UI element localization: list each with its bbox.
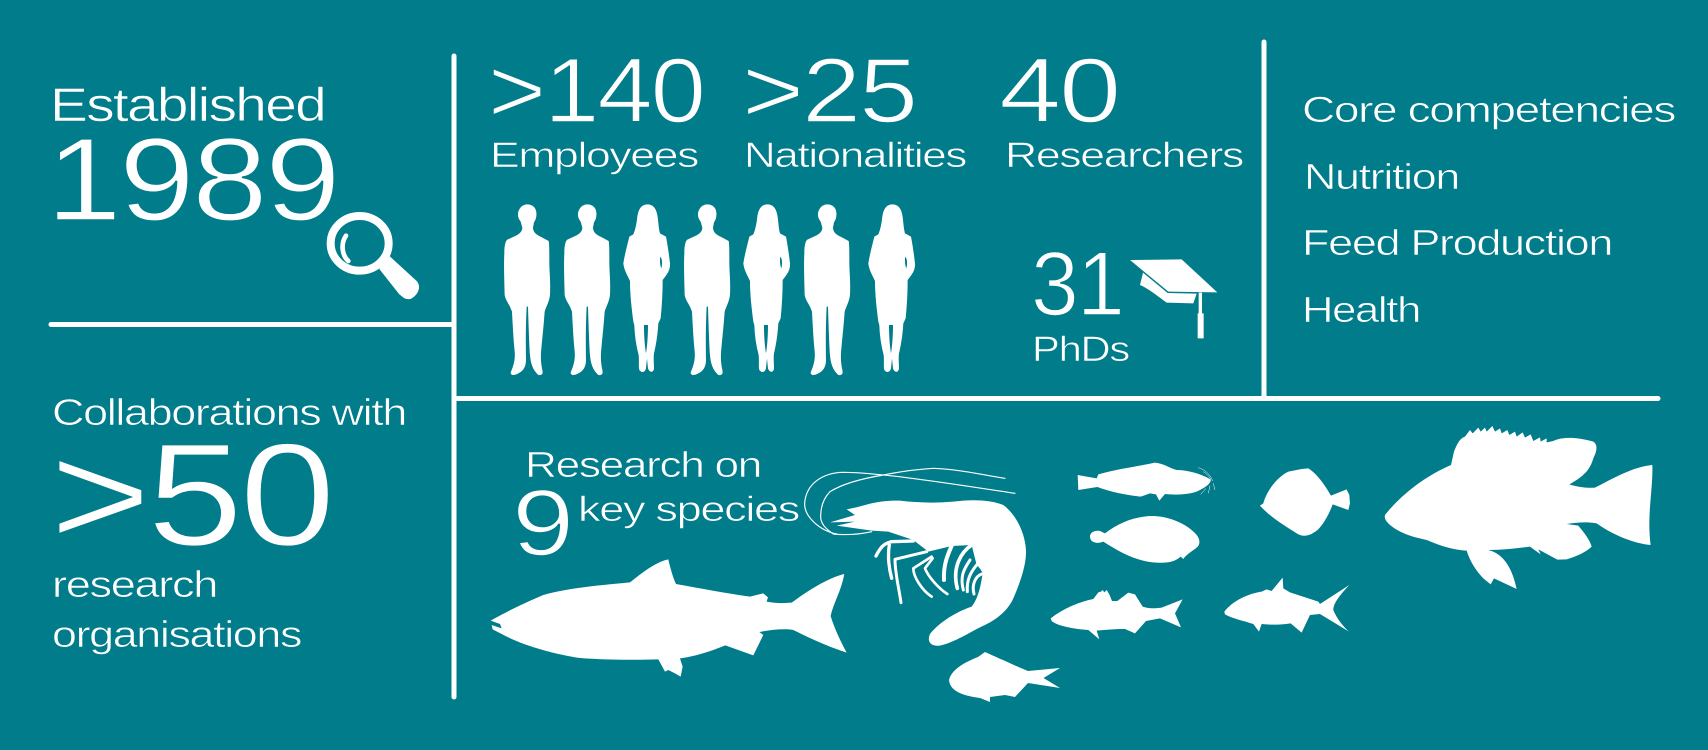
panel: key species [491,426,1652,702]
text: Health: Health [1302,289,1420,330]
panel: established [46,78,419,299]
stat: >25 Nationalities [742,40,967,175]
icon: man 2 [564,204,610,375]
stat: >25 Nationalities: Nationalities [744,136,967,175]
icon: shrimp [805,468,1026,646]
icon: amberjack [1224,578,1349,633]
icon: graduation cap [1130,259,1217,338]
text: Feed Production: Feed Production [1302,222,1612,263]
stat: 40 Researchers [999,40,1244,175]
heading: Core competencies: Core competencies [1302,89,1675,130]
text: organisations: organisations [52,614,302,655]
icon: salmon [491,559,847,677]
icon: sole [1090,516,1199,563]
icon: large perch [1385,426,1652,589]
text: key species: key species [578,490,800,529]
icon: bream [949,652,1060,702]
stat: 40 Researchers: Researchers [1005,136,1244,175]
heading: Research on: Research on [525,444,761,485]
icon: seabass [1051,590,1183,639]
stat: 40 Researchers: 40 [999,40,1119,142]
stat: >140 Employees: Employees [490,136,699,175]
number: 1989: 1989 [46,114,338,246]
text: Collaborations with: Collaborations with [52,392,406,433]
panel: core competencies [1302,89,1675,330]
text: research: research [52,564,217,605]
icon: man 4 [804,204,850,375]
stat: >140 Employees: >140 [488,40,704,142]
stat: >140 Employees [488,40,704,175]
panel: staff numbers [488,40,1244,375]
icon: man 3 [684,204,730,375]
icon: woman 3 [868,204,915,372]
icon: man 1 [504,204,550,375]
panel: collaborations [50,392,406,655]
number: >50: >50 [50,413,332,576]
icon: woman 1 [623,204,670,372]
stat: >25 Nationalities: >25 [742,40,916,142]
icon: catfish [1078,463,1215,501]
heading: Established: Established [50,78,325,131]
icon: magnifying glass [331,216,419,299]
stat: 31 PhDs: 31 [1031,234,1123,335]
number: 9: 9 [512,470,572,575]
icon: turbot [1260,468,1350,536]
icon: woman 2 [743,204,790,372]
stat: 31 PhDs: PhDs [1032,330,1130,369]
text: Nutrition: Nutrition [1304,156,1459,197]
icon: row of staff silhouettes [504,204,915,375]
